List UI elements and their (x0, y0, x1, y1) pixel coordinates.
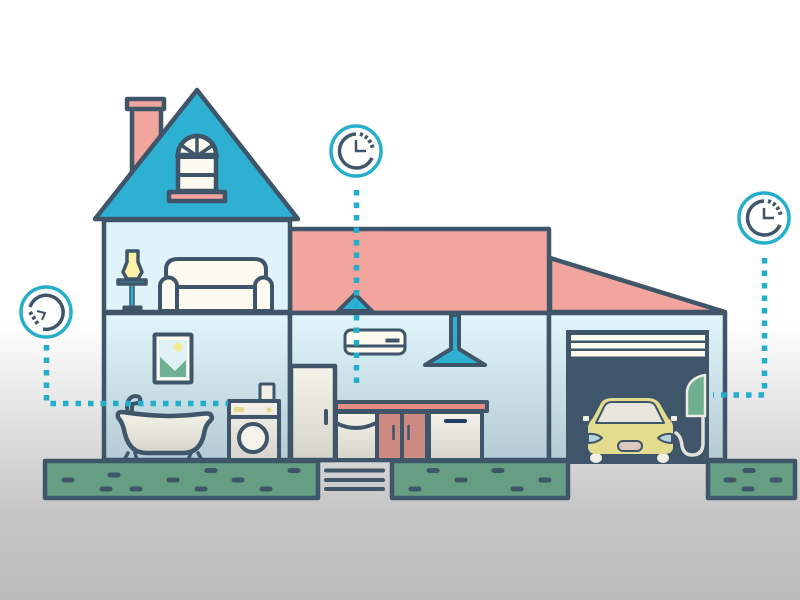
garage red roof (550, 258, 725, 312)
dotted connector lines (46, 190, 764, 404)
fridge (291, 366, 335, 460)
attic window (169, 136, 225, 201)
middle red roof (290, 229, 549, 313)
clock: right (739, 193, 789, 243)
blue attic roof (95, 90, 298, 219)
air conditioner (345, 330, 405, 354)
clock: left (21, 287, 71, 337)
clock: middle (331, 126, 381, 176)
lower floor walls (104, 313, 290, 460)
middle connector (354, 190, 359, 390)
EV charger (676, 375, 705, 455)
range hood (425, 315, 485, 365)
upper floor wall (104, 220, 290, 312)
chimney (127, 99, 164, 186)
left connector (46, 345, 228, 404)
garage wall (549, 313, 725, 460)
washing machine (229, 384, 279, 460)
air vent triangle (338, 294, 372, 311)
kitchen counter (336, 402, 487, 460)
car (583, 398, 677, 463)
bathtub (118, 396, 212, 460)
house (45, 90, 795, 498)
picture frame (154, 334, 192, 382)
sofa (160, 259, 272, 311)
table lamp (118, 251, 146, 310)
garage door (566, 330, 709, 464)
ground dashes (64, 470, 780, 489)
kitchen wall (290, 313, 549, 460)
steps (326, 470, 383, 489)
right connector (713, 258, 764, 395)
ground patches (45, 461, 795, 498)
